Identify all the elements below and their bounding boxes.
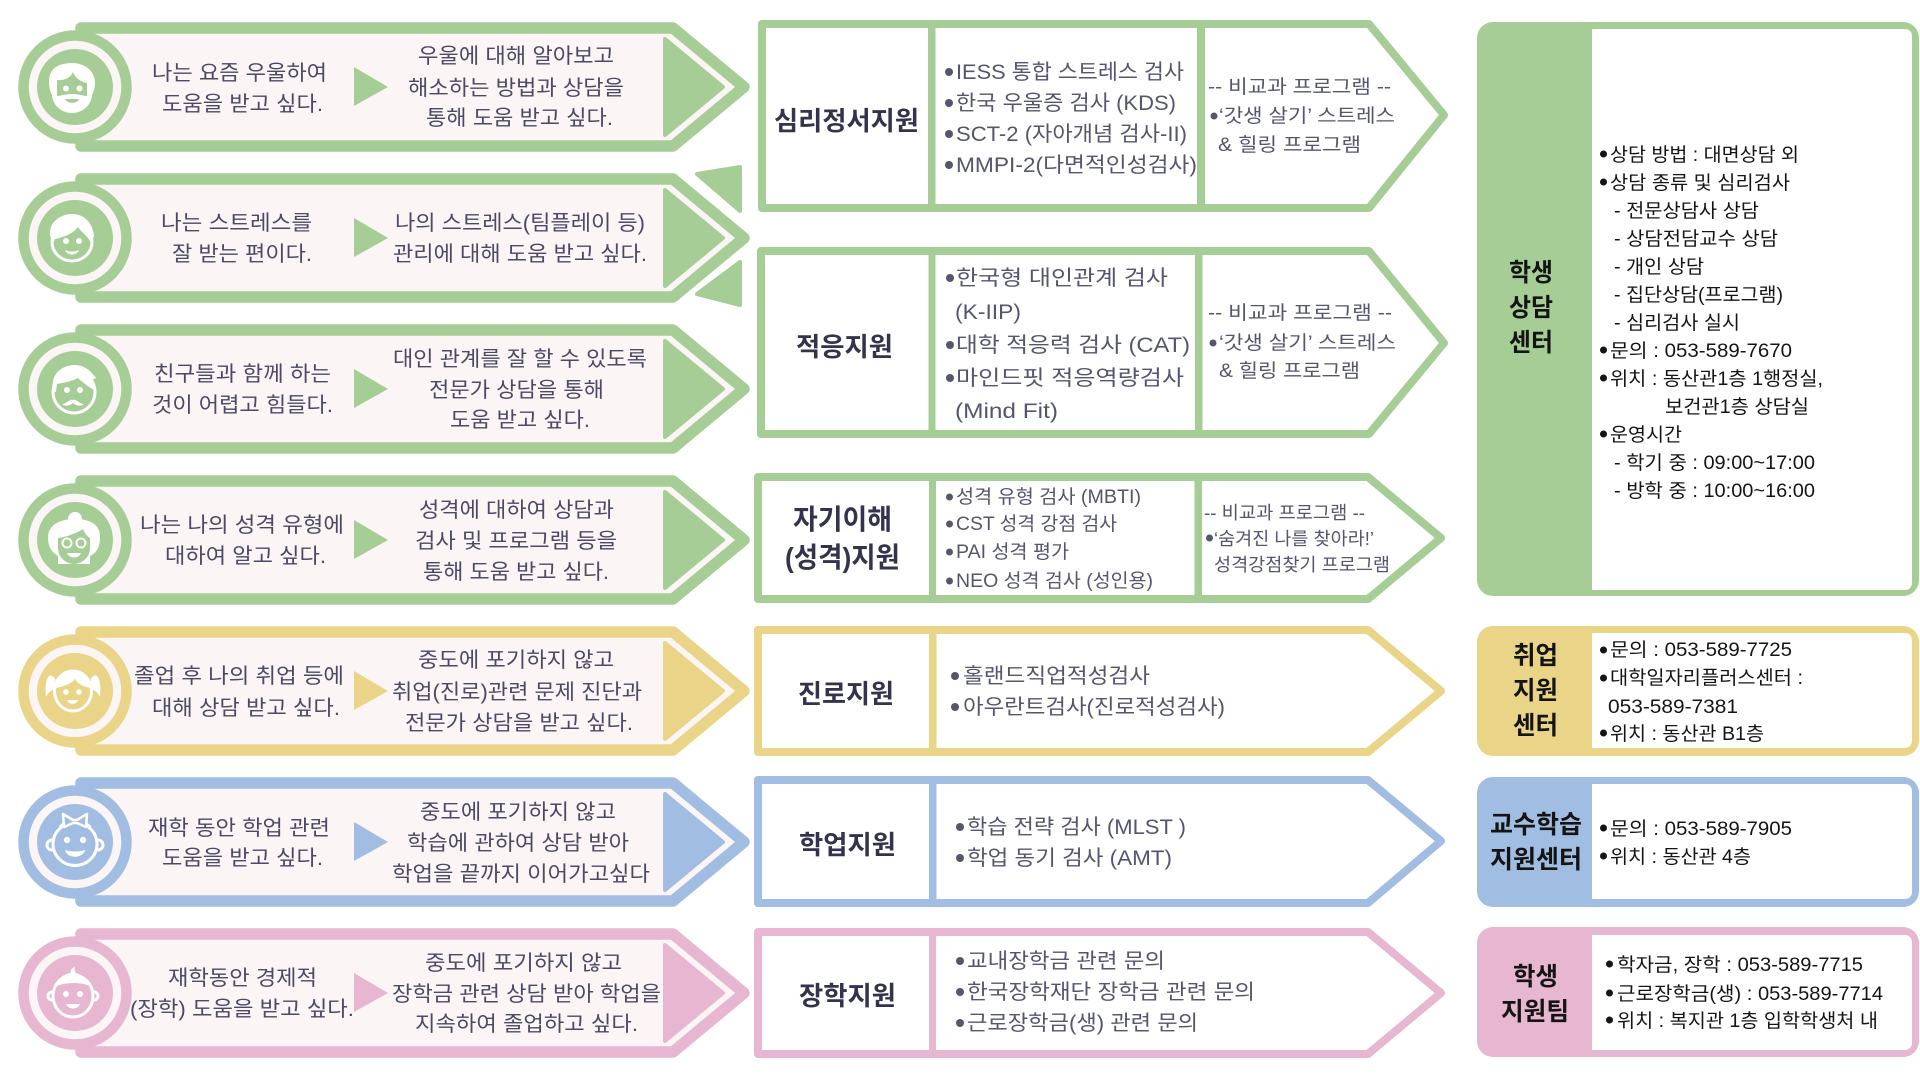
test list bbox=[945, 61, 1197, 177]
big triangle bbox=[665, 341, 723, 437]
icon: moustache man bbox=[24, 338, 126, 440]
arrow body bbox=[81, 934, 744, 1052]
row 4: need arrow: 통해 도움 받고 싶다. bbox=[423, 561, 609, 584]
row 2: need arrow: 관리에 대해 도움 받고 싶다. bbox=[393, 243, 647, 266]
details list: 053-589-7381 bbox=[1608, 697, 1738, 718]
row 5: need arrow: 대해 상담 받고 싶다. bbox=[152, 697, 340, 720]
icon: grandmother with glasses bbox=[24, 488, 126, 592]
programme list: -- 비교과 프로그램 -- bbox=[1208, 302, 1392, 324]
details list: 근로장학금(생) : 053-589-7714 bbox=[1617, 983, 1883, 1005]
row 4: need arrow bbox=[24, 481, 744, 599]
panel: 자기이해(성격)지원 bbox=[758, 473, 1441, 603]
details list: - 심리검사 실시 bbox=[1614, 312, 1740, 334]
heading: (성격)지원 bbox=[785, 542, 900, 573]
panel background bbox=[1477, 777, 1919, 907]
box outline bbox=[761, 251, 1444, 434]
decorative small triangles between rows bbox=[697, 167, 740, 305]
test list: 홀랜드직업적성검사 bbox=[963, 665, 1150, 688]
test list: 아우란트검사(진로적성검사) bbox=[963, 696, 1225, 719]
programme list: ‘갓생 살기’ 스트레스 bbox=[1219, 332, 1396, 354]
test list: SCT-2 (자아개념 검사-II) bbox=[956, 123, 1187, 146]
goal text: 중도에 포기하지 않고 bbox=[418, 649, 614, 672]
row 7: need arrow: 장학금 관련 상담 받아 학업을 bbox=[392, 983, 661, 1006]
big triangle bbox=[665, 794, 723, 890]
test list bbox=[956, 950, 1255, 1035]
panel: 학업지원 bbox=[758, 776, 1441, 907]
heading: 센터 bbox=[1513, 712, 1558, 740]
heading: 적응지원 bbox=[796, 332, 893, 362]
programme list bbox=[1208, 76, 1395, 156]
row 7: need arrow bbox=[24, 934, 744, 1052]
heading bbox=[1501, 963, 1569, 1026]
small arrow bbox=[354, 369, 388, 408]
test list bbox=[946, 267, 1190, 423]
test list: 한국장학재단 장학금 관련 문의 bbox=[967, 981, 1255, 1004]
details list: 문의 : 053-589-7725 bbox=[1610, 639, 1792, 661]
heading bbox=[1513, 642, 1558, 740]
test list: 교내장학금 관련 문의 bbox=[967, 950, 1165, 973]
details list: - 집단상담(프로그램) bbox=[1614, 284, 1783, 306]
details list: 상담 방법 : 대면상담 외 bbox=[1610, 144, 1799, 166]
panel background bbox=[1477, 22, 1919, 596]
test list: 한국형 대인관계 검사 bbox=[956, 267, 1168, 290]
situation text: 나는 요즘 우울하여 bbox=[152, 62, 327, 85]
row 3: need arrow: 것이 어렵고 힘들다. bbox=[152, 394, 333, 417]
test list: 학습 전략 검사 (MLST ) bbox=[967, 816, 1186, 839]
details list: - 학기 중 : 09:00~17:00 bbox=[1614, 452, 1815, 474]
heading: 취업 bbox=[1513, 642, 1558, 670]
heading bbox=[785, 504, 900, 573]
row 5: need arrow: 취업(진로)관련 문제 진단과 bbox=[392, 681, 642, 704]
heading: 지원 bbox=[1513, 677, 1558, 705]
test list: 근로장학금(생) 관련 문의 bbox=[967, 1012, 1198, 1035]
heading: 진로지원 bbox=[798, 679, 894, 709]
goal text: 나의 스트레스(팀플레이 등) bbox=[395, 212, 645, 235]
panel: 취업지원센터 bbox=[1477, 626, 1919, 756]
details list bbox=[1600, 639, 1803, 745]
heading: 심리정서지원 bbox=[774, 106, 919, 136]
test list: PAI 성격 평가 bbox=[956, 541, 1069, 563]
small arrow bbox=[354, 520, 388, 559]
arrow body bbox=[81, 179, 744, 297]
heading bbox=[1509, 259, 1553, 357]
situation text: 나는 스트레스를 bbox=[161, 212, 312, 235]
test list: 마인드핏 적응역량검사 bbox=[956, 367, 1184, 390]
test list bbox=[951, 665, 1225, 719]
small arrow bbox=[354, 218, 388, 257]
icon: bearded man bbox=[24, 36, 126, 138]
panel background bbox=[1477, 626, 1919, 756]
row 7: need arrow: (장학) 도움을 받고 싶다. bbox=[130, 998, 354, 1021]
programme list: & 힐링 프로그램 bbox=[1219, 360, 1360, 382]
small arrow bbox=[354, 973, 388, 1012]
details list: 상담 종류 및 심리검사 bbox=[1610, 172, 1790, 194]
heading: 학생 bbox=[1513, 963, 1558, 991]
details list: 문의 : 053-589-7670 bbox=[1610, 340, 1792, 362]
details list: 위치 : 복지관 1층 입학학생처 내 bbox=[1617, 1010, 1878, 1032]
big triangle bbox=[665, 39, 723, 135]
heading: 학업지원 bbox=[799, 830, 896, 860]
details list: - 개인 상담 bbox=[1614, 256, 1704, 278]
goal text: 우울에 대해 알아보고 bbox=[418, 45, 614, 68]
details list: - 상담전담교수 상담 bbox=[1614, 228, 1778, 250]
goal text: 중도에 포기하지 않고 bbox=[425, 952, 622, 975]
details list: - 전문상담사 상담 bbox=[1614, 200, 1759, 222]
small arrow bbox=[354, 67, 388, 106]
heading: 장학지원 bbox=[799, 981, 896, 1011]
heading bbox=[1490, 811, 1582, 874]
arrow body bbox=[81, 481, 744, 599]
panel: 교수학습지원센터 bbox=[1477, 777, 1919, 907]
programme list: ‘숨겨진 나를 찾아라!’ bbox=[1214, 529, 1374, 549]
row 2: need arrow: 잘 받는 편이다. bbox=[172, 243, 312, 266]
test list: 성격 유형 검사 (MBTI) bbox=[956, 486, 1141, 508]
programme list: ‘갓생 살기’ 스트레스 bbox=[1219, 105, 1395, 127]
big triangle bbox=[665, 190, 723, 286]
small triangle lower bbox=[697, 262, 740, 305]
test list: IESS 통합 스트레스 검사 bbox=[956, 61, 1184, 84]
row 5: need arrow bbox=[24, 632, 744, 750]
icon: girl with pigtails bbox=[24, 640, 126, 742]
test list: 한국 우울증 검사 (KDS) bbox=[956, 92, 1176, 115]
test list: 학업 동기 검사 (AMT) bbox=[967, 847, 1172, 870]
arrow body bbox=[81, 632, 744, 750]
icon: woman bbox=[24, 186, 126, 290]
box outline bbox=[758, 780, 1441, 903]
heading: 교수학습 bbox=[1490, 811, 1582, 839]
small triangle upper bbox=[697, 167, 740, 211]
panel: 학생지원팀 bbox=[1477, 927, 1919, 1057]
panel: 장학지원 bbox=[758, 928, 1441, 1058]
row 1: need arrow bbox=[24, 28, 744, 146]
situation text: 졸업 후 나의 취업 등에 bbox=[134, 665, 344, 688]
test list: (Mind Fit) bbox=[955, 400, 1058, 423]
test list: NEO 성격 검사 (성인용) bbox=[956, 570, 1153, 592]
row 1: need arrow: 해소하는 방법과 상담을 bbox=[408, 77, 624, 100]
row 4: need arrow: 검사 및 프로그램 등을 bbox=[415, 530, 617, 553]
arrow body bbox=[81, 330, 744, 448]
big triangle bbox=[665, 945, 723, 1041]
panel: 학생상담센터 bbox=[1477, 22, 1919, 596]
panel background bbox=[1477, 927, 1919, 1057]
details list: 위치 : 동산관 B1층 bbox=[1610, 723, 1764, 745]
situation text: 재학동안 경제적 bbox=[168, 967, 317, 990]
situation text: 나는 나의 성격 유형에 bbox=[140, 514, 344, 537]
programme list bbox=[1208, 302, 1396, 382]
row 3: need arrow bbox=[24, 330, 744, 448]
details list: 운영시간 bbox=[1610, 424, 1682, 446]
small arrow bbox=[354, 671, 388, 710]
panel: 적응지원 bbox=[761, 247, 1444, 438]
box outline bbox=[758, 932, 1441, 1054]
goal text: 성격에 대하여 상담과 bbox=[419, 499, 614, 522]
goal text: 중도에 포기하지 않고 bbox=[420, 801, 616, 824]
icon: baby with curl bbox=[24, 942, 126, 1044]
details list bbox=[1600, 818, 1792, 868]
row 6: need arrow: 학업을 끝까지 이어가고싶다 bbox=[392, 863, 650, 886]
test list: (K-IIP) bbox=[955, 301, 1021, 324]
details list: 보건관1층 상담실 bbox=[1665, 396, 1809, 418]
box outline bbox=[758, 477, 1441, 599]
heading: 상담 bbox=[1509, 294, 1553, 322]
programme list bbox=[1204, 503, 1390, 575]
big triangle bbox=[665, 643, 723, 739]
heading: 센터 bbox=[1509, 329, 1553, 357]
row 7: need arrow: 지속하여 졸업하고 싶다. bbox=[415, 1013, 638, 1036]
panel: 심리정서지원 bbox=[762, 20, 1444, 212]
programme list: 성격강점찾기 프로그램 bbox=[1214, 555, 1390, 575]
row 6: need arrow: 도움을 받고 싶다. bbox=[162, 847, 323, 870]
goal text: 대인 관계를 잘 할 수 있도록 bbox=[393, 348, 647, 371]
row 1: need arrow: 도움을 받고 싶다. bbox=[162, 93, 323, 116]
situation text: 재학 동안 학업 관련 bbox=[148, 817, 330, 840]
heading: 학생 bbox=[1509, 259, 1553, 287]
arrow body bbox=[81, 28, 744, 146]
big triangle bbox=[665, 492, 723, 588]
programme list: -- 비교과 프로그램 -- bbox=[1204, 503, 1365, 523]
programme list: & 힐링 프로그램 bbox=[1218, 134, 1361, 156]
situation text: 친구들과 함께 하는 bbox=[154, 363, 331, 386]
test list: 대학 적응력 검사 (CAT) bbox=[956, 334, 1190, 357]
details list bbox=[1606, 954, 1883, 1032]
box outline bbox=[762, 24, 1444, 208]
row 3: need arrow: 전문가 상담을 통해 bbox=[429, 379, 604, 402]
details list bbox=[1600, 144, 1823, 502]
heading: 지원센터 bbox=[1490, 846, 1582, 874]
arrow body bbox=[81, 783, 744, 901]
details list: 대학일자리플러스센터 : bbox=[1610, 667, 1803, 689]
test list bbox=[946, 486, 1153, 592]
heading: 자기이해 bbox=[793, 504, 892, 535]
details list: 문의 : 053-589-7905 bbox=[1610, 818, 1792, 840]
small arrow bbox=[354, 822, 388, 861]
row 3: need arrow: 도움 받고 싶다. bbox=[450, 409, 590, 432]
test list bbox=[956, 816, 1186, 870]
heading: 지원팀 bbox=[1501, 998, 1569, 1026]
panel: 진로지원 bbox=[758, 626, 1441, 756]
row 6: need arrow bbox=[24, 783, 744, 901]
test list: MMPI-2(다면적인성검사) bbox=[956, 154, 1197, 177]
row 1: need arrow: 통해 도움 받고 싶다. bbox=[426, 107, 613, 130]
details list: 학자금, 장학 : 053-589-7715 bbox=[1617, 954, 1863, 976]
row 2: need arrow bbox=[24, 179, 744, 297]
icon: baby with bow bbox=[24, 790, 126, 894]
details list: - 방학 중 : 10:00~16:00 bbox=[1614, 480, 1815, 502]
details list: 위치 : 동산관 4층 bbox=[1610, 846, 1751, 868]
test list: CST 성격 강점 검사 bbox=[956, 513, 1117, 535]
row 5: need arrow: 전문가 상담을 받고 싶다. bbox=[405, 712, 633, 735]
row 6: need arrow: 학습에 관하여 상담 받아 bbox=[407, 832, 629, 855]
details list: 위치 : 동산관1층 1행정실, bbox=[1610, 368, 1823, 390]
programme list: -- 비교과 프로그램 -- bbox=[1208, 76, 1391, 98]
box outline bbox=[758, 630, 1441, 752]
row 4: need arrow: 대하여 알고 싶다. bbox=[165, 545, 326, 568]
